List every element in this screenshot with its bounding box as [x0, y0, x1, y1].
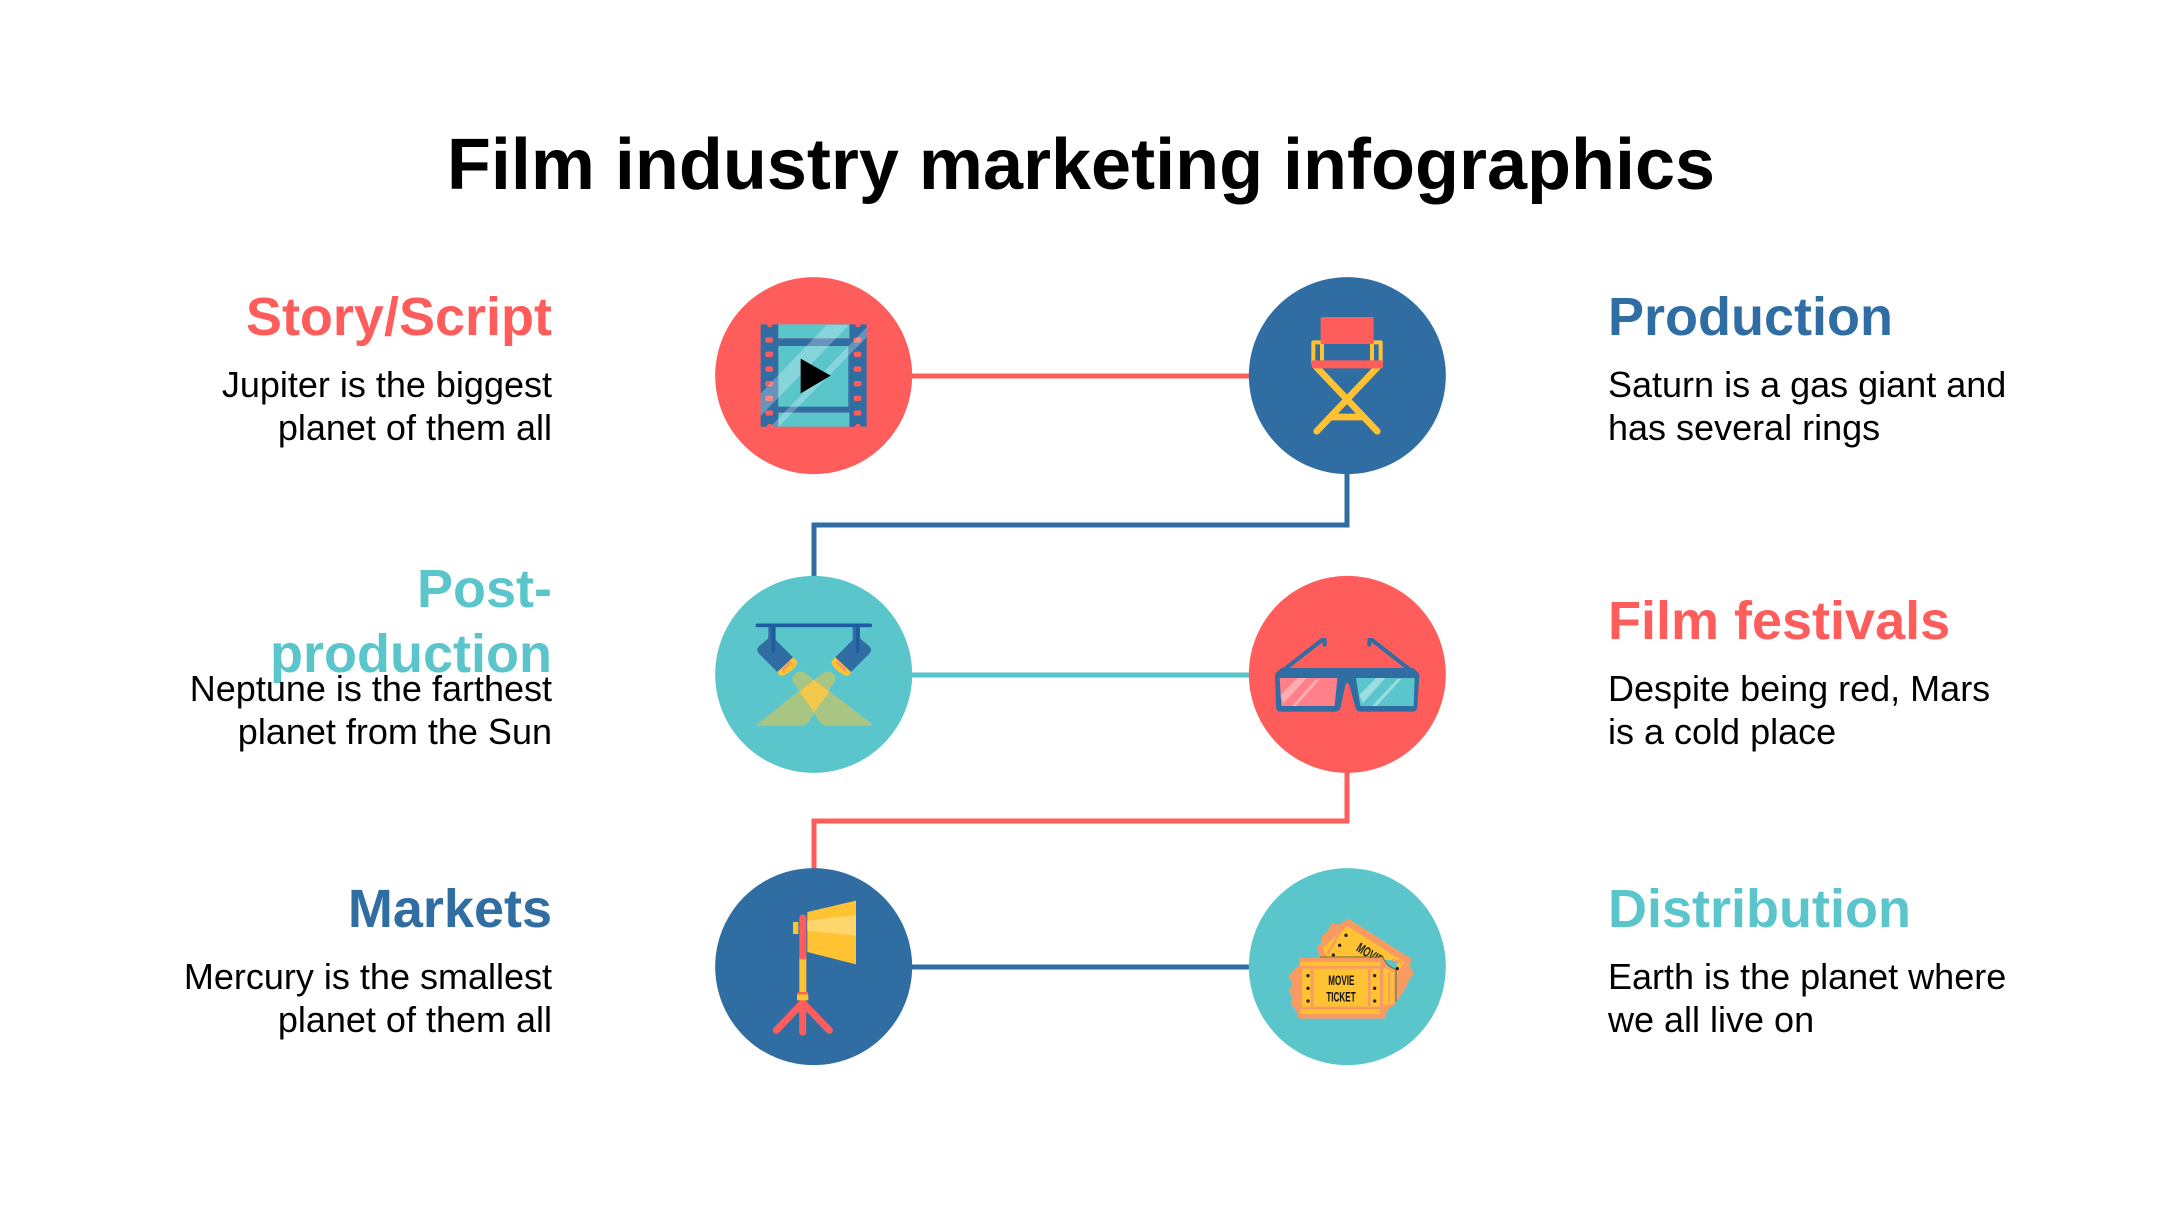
- connector: story to production: [900, 374, 1260, 378]
- connector lines: [814, 376, 1347, 967]
- heading: story/script: Story/Script: [246, 287, 552, 347]
- description: story/script: planet of them all: [278, 407, 552, 448]
- connector: production to post-production: [814, 470, 1347, 590]
- icon: movie tickets on teal circle: [1249, 868, 1446, 1065]
- icon: movie tickets on teal circle: TICKET: [1326, 991, 1356, 1005]
- heading: distribution: Distribution: [1608, 879, 1911, 939]
- title: Film industry marketing infographics: [447, 125, 1715, 205]
- icon: movie tickets on teal circle: MOVIE: [1353, 940, 1386, 968]
- icon: studio lamp on blue circle: [715, 868, 912, 1065]
- description: distribution: Earth is the planet where: [1608, 956, 2006, 997]
- heading: post-production: Post-: [417, 559, 552, 619]
- description: film festivals: is a cold place: [1608, 711, 1836, 752]
- heading: markets: Markets: [348, 879, 552, 939]
- description: distribution: we all live on: [1607, 999, 1814, 1040]
- description: story/script: Jupiter is the biggest: [222, 364, 552, 405]
- description: film festivals: Despite being red, Mars: [1608, 668, 1990, 709]
- heading: film festivals: Film festivals: [1608, 591, 1950, 651]
- connector: post-production to festivals: [900, 672, 1260, 678]
- description: production: has several rings: [1608, 407, 1880, 448]
- connector: festivals to markets: [814, 770, 1347, 880]
- description: post-production: planet from the Sun: [238, 711, 552, 752]
- icon: movie tickets on teal circle: MOVIE: [1328, 974, 1355, 989]
- panel: markets text: [184, 879, 552, 1040]
- connector: markets to distribution: [900, 964, 1260, 970]
- icon: director chair on blue circle: [1249, 277, 1446, 474]
- panel: distribution text: [1607, 879, 2006, 1040]
- icon: film strip on red circle: [715, 277, 912, 474]
- panel: story/script text: [222, 287, 552, 448]
- description: production: Saturn is a gas giant and: [1608, 364, 2006, 405]
- heading: post-production: production: [270, 624, 552, 684]
- panel: production text: [1608, 287, 2006, 448]
- icon: stage spotlights on teal circle: [715, 576, 912, 773]
- panel: film festivals text: [1608, 591, 1990, 752]
- description: markets: planet of them all: [278, 999, 552, 1040]
- icon: 3D glasses on red circle: [1249, 576, 1446, 773]
- description: markets: Mercury is the smallest: [184, 956, 552, 997]
- description: post-production: Neptune is the farthest: [190, 668, 552, 709]
- panel: post-production text: [190, 559, 552, 752]
- heading: production: Production: [1608, 287, 1893, 347]
